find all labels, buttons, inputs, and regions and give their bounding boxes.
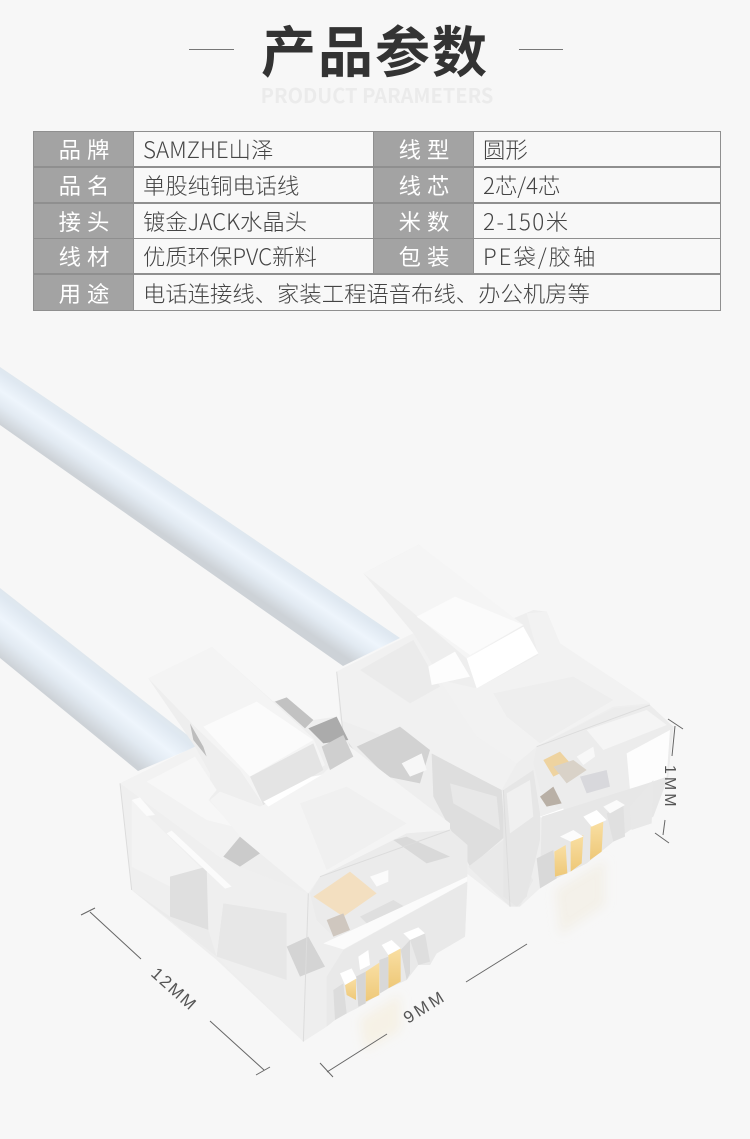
parameter table: 品名: [59, 169, 115, 201]
connector reflections: [360, 860, 605, 1050]
parameter table: 电话连接线、家装工程语音布线、办公机房等: [143, 277, 590, 309]
parameter table: 线芯: [399, 169, 455, 201]
connector fingers: [120, 783, 467, 1042]
dimension: 1MM: 1MM: [661, 765, 678, 810]
parameter table: SAMZHE山泽: [143, 133, 273, 165]
parameter table: 圆形: [483, 133, 528, 165]
parameter table: 单股纯铜电话线: [143, 169, 299, 201]
connector: rear: [337, 545, 673, 907]
parameter table: 线型: [399, 133, 455, 165]
subtitle: PRODUCT PARAMETERS: [261, 80, 493, 109]
dimension: 9MM: 9MM: [400, 986, 450, 1027]
parameter table: 米数: [399, 205, 455, 237]
dimension: 12MM: [81, 908, 270, 1075]
dimension: 12MM: 12MM: [147, 964, 201, 1015]
parameter table: PE袋/胶轴: [483, 240, 597, 272]
parameter table: 品牌: [59, 133, 115, 165]
dimension: 9MM: [320, 944, 527, 1077]
parameter table: 优质环保PVC新料: [143, 240, 317, 272]
dimension: 1MM: [655, 719, 683, 843]
cable: rear: [0, 367, 400, 666]
parameter table: 包装: [399, 240, 455, 272]
cable: front: [0, 588, 200, 771]
parameter table: 用途: [59, 277, 115, 309]
parameter table: [33, 131, 721, 311]
parameter table: 线材: [59, 240, 115, 272]
title: 产品参数: [261, 8, 489, 88]
parameter table: 2芯/4芯: [483, 169, 560, 201]
connector: front: [120, 647, 467, 1042]
parameter table: 接头: [59, 205, 115, 237]
title rule left: [189, 49, 234, 50]
parameter table: 镀金JACK水晶头: [143, 205, 307, 237]
title rule right: [519, 49, 563, 50]
parameter table: 2-150米: [483, 205, 570, 237]
connector highlights: [132, 797, 467, 949]
connector latch tail: [148, 647, 353, 807]
